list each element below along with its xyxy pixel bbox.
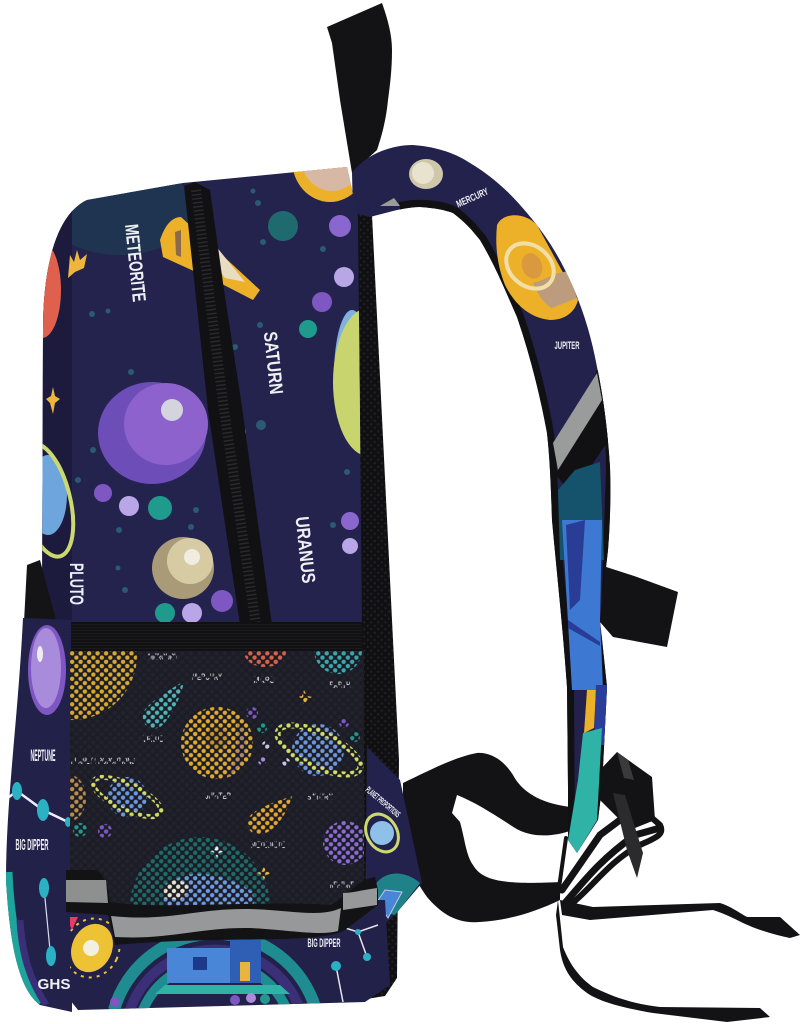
back mesh padding (350, 205, 399, 1000)
pocket faint labels: JUPITER (205, 791, 231, 801)
beige planet (152, 537, 214, 599)
thin connecting straps (558, 818, 661, 905)
label: Jupiter: JUPITER (554, 340, 580, 352)
mesh overlay (70, 650, 364, 912)
bottom front panel: BIG DIPPER (308, 936, 341, 950)
mesh side pocket (66, 622, 378, 945)
teal half planet (314, 626, 362, 674)
flap teal planet (375, 873, 420, 915)
bottom dots (110, 993, 270, 1007)
constellation right (331, 925, 378, 1002)
flap ringed planet (359, 808, 405, 858)
teal meteor (143, 681, 184, 729)
upper strap buckle (600, 565, 678, 647)
flap diamond (377, 890, 402, 918)
decorative dots (94, 211, 359, 623)
label: Saturn: SATURN (259, 331, 286, 395)
lower left side panel (5, 618, 72, 1012)
central yellow planet (181, 707, 253, 779)
planet Neptune (28, 625, 66, 715)
pocket stars (257, 690, 313, 880)
top grab handle (327, 3, 392, 173)
pocket small dots (73, 707, 360, 838)
side pocket flap right (359, 747, 422, 940)
lower strap buckle (600, 752, 655, 878)
lower left side panel: NEPTUNE (30, 746, 56, 765)
strap teal foot (568, 728, 602, 853)
pocket faint labels: MARS (254, 675, 274, 685)
pocket faint labels: MERCURY (148, 652, 178, 662)
shoulder strap (352, 145, 612, 853)
purple planet (98, 382, 208, 484)
upper body panel (42, 167, 362, 622)
strap blue building (562, 520, 603, 690)
yellow planet (70, 651, 137, 720)
constellation left (5, 782, 71, 966)
elastic side gather (24, 560, 56, 622)
teal arcs behind house (114, 934, 316, 1010)
pocket faint labels: METEORITE (251, 840, 285, 850)
lower left side panel: BIG DIPPER (16, 837, 49, 854)
pocket faint labels: PLANET PROPORTIONS (71, 756, 135, 766)
pink triangle (70, 917, 78, 930)
label: Uranus: URANUS (291, 516, 318, 584)
green ring planet right (333, 310, 360, 454)
meteor orange (160, 217, 260, 300)
left side seam shading (42, 200, 72, 625)
pocket faint labels: SATURN (307, 792, 333, 802)
gold stars (46, 250, 87, 414)
strap planet Mercury (409, 159, 443, 189)
orange meteor (248, 796, 292, 834)
tail strap right (560, 900, 800, 938)
strap inner black edge (400, 207, 568, 840)
pocket elastic band (71, 622, 362, 651)
purple planet (323, 821, 367, 865)
right ringed planet (271, 716, 367, 784)
label: Mercury: MERCURY (455, 186, 491, 210)
lower waist strap (403, 753, 573, 922)
strap grey tag (380, 198, 400, 206)
label: GHS: GHS (38, 976, 70, 993)
left ringed planet (88, 770, 166, 824)
pocket faint labels: EARTH (330, 680, 350, 690)
reflective strip on strap (553, 373, 602, 470)
pocket faint labels: VENUS (142, 734, 164, 744)
Saturn-like blue planet left (42, 444, 76, 559)
strap teal scene (558, 462, 604, 560)
top orange planet (294, 167, 353, 202)
bottom loop strap (556, 900, 770, 1022)
pocket faint labels: NEPTUNE (330, 880, 354, 890)
strap outer black band (600, 370, 610, 820)
main zipper (184, 182, 272, 625)
bottom-left teal arcs (8, 872, 46, 1005)
left brown planet (54, 775, 86, 821)
pocket faint labels: MERCURY (192, 672, 222, 682)
strap planet Jupiter (496, 215, 578, 320)
teal tint top-left (58, 184, 188, 255)
label: Meteorite: METEORITE (120, 223, 149, 303)
green ground (155, 985, 290, 994)
pocket faint labels (71, 652, 354, 890)
side pocket flap right: PLANET PROPORTIONS (364, 785, 402, 819)
strap black stripe (557, 370, 608, 484)
yellow galaxy (70, 918, 120, 978)
label: Pluto: PLUTO (65, 563, 86, 605)
red planet (43, 250, 61, 338)
pocket binding and reflective strip (66, 870, 378, 945)
small teal speckles (75, 188, 350, 593)
teal big planet (130, 837, 270, 977)
blue house (167, 940, 261, 983)
bottom front panel (55, 900, 390, 1010)
red half planet (244, 637, 286, 667)
